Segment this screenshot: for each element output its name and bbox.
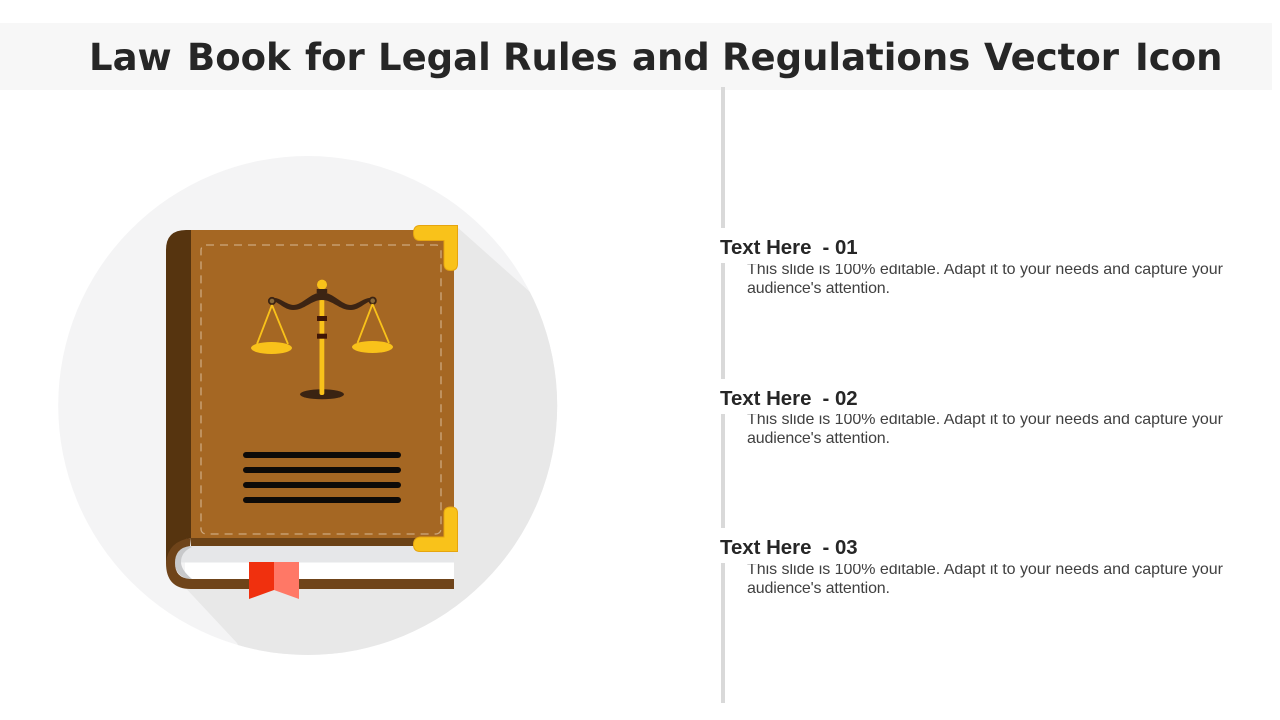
item 01 body: [747, 264, 1223, 293]
icon: law book in circle: [58, 156, 570, 670]
title: for: [305, 36, 378, 79]
item 03 body: [747, 564, 1223, 593]
bookmark: [249, 562, 299, 599]
header band: [0, 23, 1272, 90]
icon: scales of justice: [251, 280, 393, 399]
title: Law: [89, 36, 185, 79]
item 02 heading: - 02: [822, 388, 858, 410]
item 01 heading: - 01: [822, 237, 858, 259]
item 03: [720, 540, 1223, 593]
title: Icon: [1135, 36, 1222, 79]
left pan: [257, 305, 288, 344]
item 01 heading: Text Here: [720, 237, 817, 259]
title: Rules: [503, 36, 631, 79]
stitching: [201, 245, 441, 534]
book pages: [175, 546, 454, 579]
title: Book: [187, 36, 304, 79]
scale beam: [272, 292, 372, 310]
top corner bracket: [414, 226, 458, 270]
item 02 body: This slide is 100% editable. Adapt it to your needs and capture your: [747, 411, 1224, 428]
title: Regulations: [722, 36, 983, 79]
item 03 heading: - 03: [822, 537, 858, 559]
scale stand: [300, 389, 344, 399]
item 03 body: This slide is 100% editable. Adapt it to your needs and capture your: [747, 561, 1224, 578]
right pan: [358, 304, 389, 343]
text lines on cover: [243, 452, 401, 503]
item 02 body: audience's attention.: [747, 430, 890, 447]
item 01: [720, 240, 1223, 293]
item 02: [720, 391, 1223, 443]
book back cover: [166, 538, 454, 589]
item 01 body: audience's attention.: [747, 280, 890, 297]
book spine: [166, 230, 191, 563]
item 02 heading: Text Here: [720, 388, 817, 410]
long shadow: [180, 226, 570, 670]
title: Legal: [378, 36, 504, 79]
title: and: [632, 36, 723, 79]
item 01 body: This slide is 100% editable. Adapt it to your needs and capture your: [747, 261, 1224, 278]
item 03 body: audience's attention.: [747, 580, 890, 597]
title: Vector: [984, 36, 1132, 79]
book front cover: [191, 230, 454, 546]
item 02 body: [747, 414, 1223, 443]
item 03 heading: Text Here: [720, 537, 817, 559]
background circle: [58, 156, 557, 655]
bottom corner bracket: [414, 507, 458, 552]
timeline line: [721, 87, 725, 703]
